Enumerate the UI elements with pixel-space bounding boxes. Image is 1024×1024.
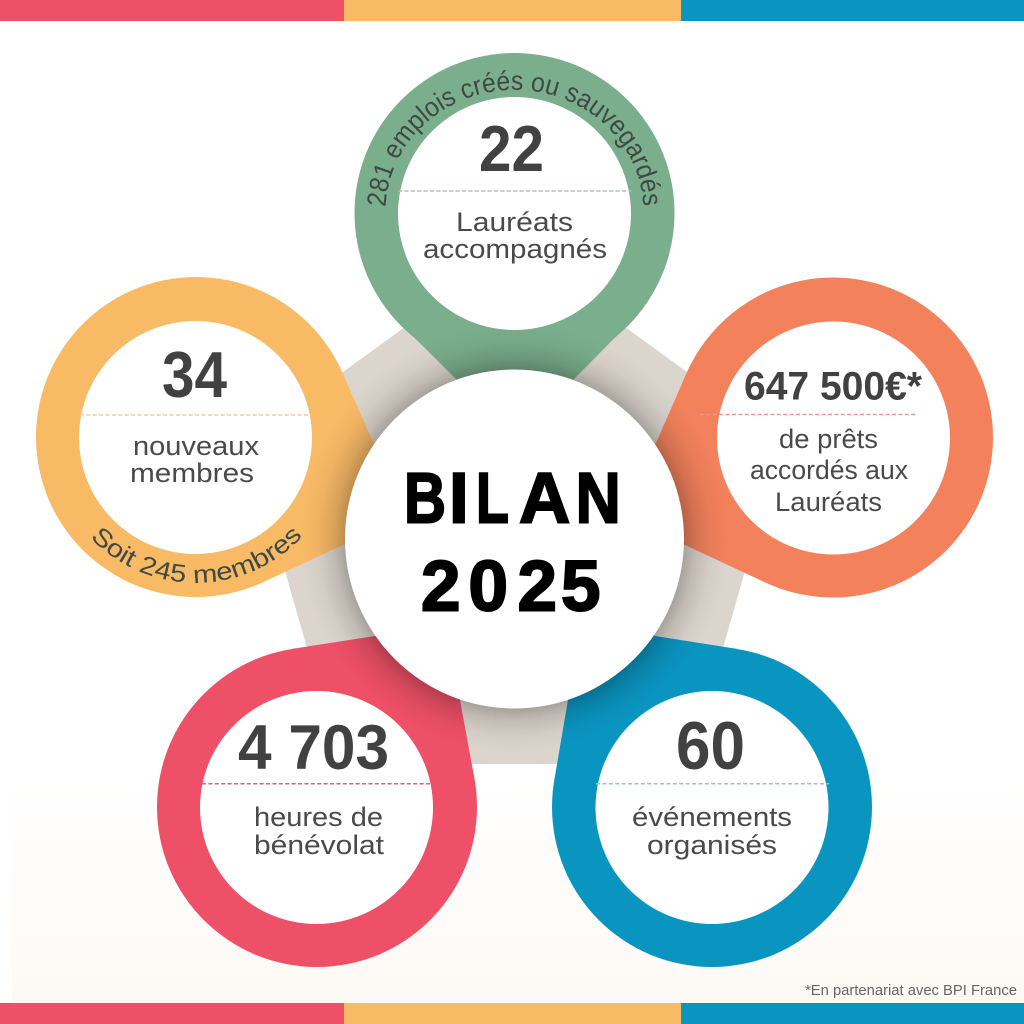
pin: blue [514,539,872,967]
stat: green: 22 [479,112,544,185]
stat: green: Lauréats [456,207,573,237]
stat: blue: événements [632,802,792,832]
top colour band [0,0,1024,21]
stat: orange: Lauréats [775,487,882,517]
stat: yellow: 34 [162,338,227,411]
footnote: *En partenariat avec BPI France [805,983,1017,999]
stat: blue [596,691,829,924]
stat: orange: de prêts [779,424,878,454]
stat: orange: accordés aux [750,455,908,485]
stat: yellow: nouveaux [133,431,260,461]
stat: red: heures de [254,802,383,832]
title: 2025 [421,548,600,626]
stat: blue: 60 [676,708,745,784]
title: L [476,459,509,538]
pin: green [354,53,674,539]
stat: red: 4 703 [238,713,389,783]
stat: yellow: membres [130,458,254,488]
stat: green: accompagnés [423,234,607,264]
bottom colour band [0,1003,1024,1024]
stat: red: bénévolat [254,830,385,860]
central pentagon [248,247,782,764]
pin: red [157,539,514,967]
stat: orange: 647 500€* [744,364,922,408]
stat: orange [700,322,950,554]
central shadow [288,313,740,765]
title: B [404,458,446,538]
stat: green [398,97,631,330]
stat: blue: organisés [647,830,777,860]
central circle [345,370,684,708]
title: I [449,460,469,538]
title: N [576,459,621,538]
curved text: green: 281 emplois créés ou sauvegardés [367,70,662,206]
page background [12,780,1024,1004]
stat: yellow [79,321,312,554]
pin: yellow [36,277,514,597]
curved text: yellow: Soit 245 membres [93,528,300,584]
pin: orange [514,278,993,598]
title: A [519,460,570,538]
title [404,458,621,626]
stat: red [200,691,433,924]
